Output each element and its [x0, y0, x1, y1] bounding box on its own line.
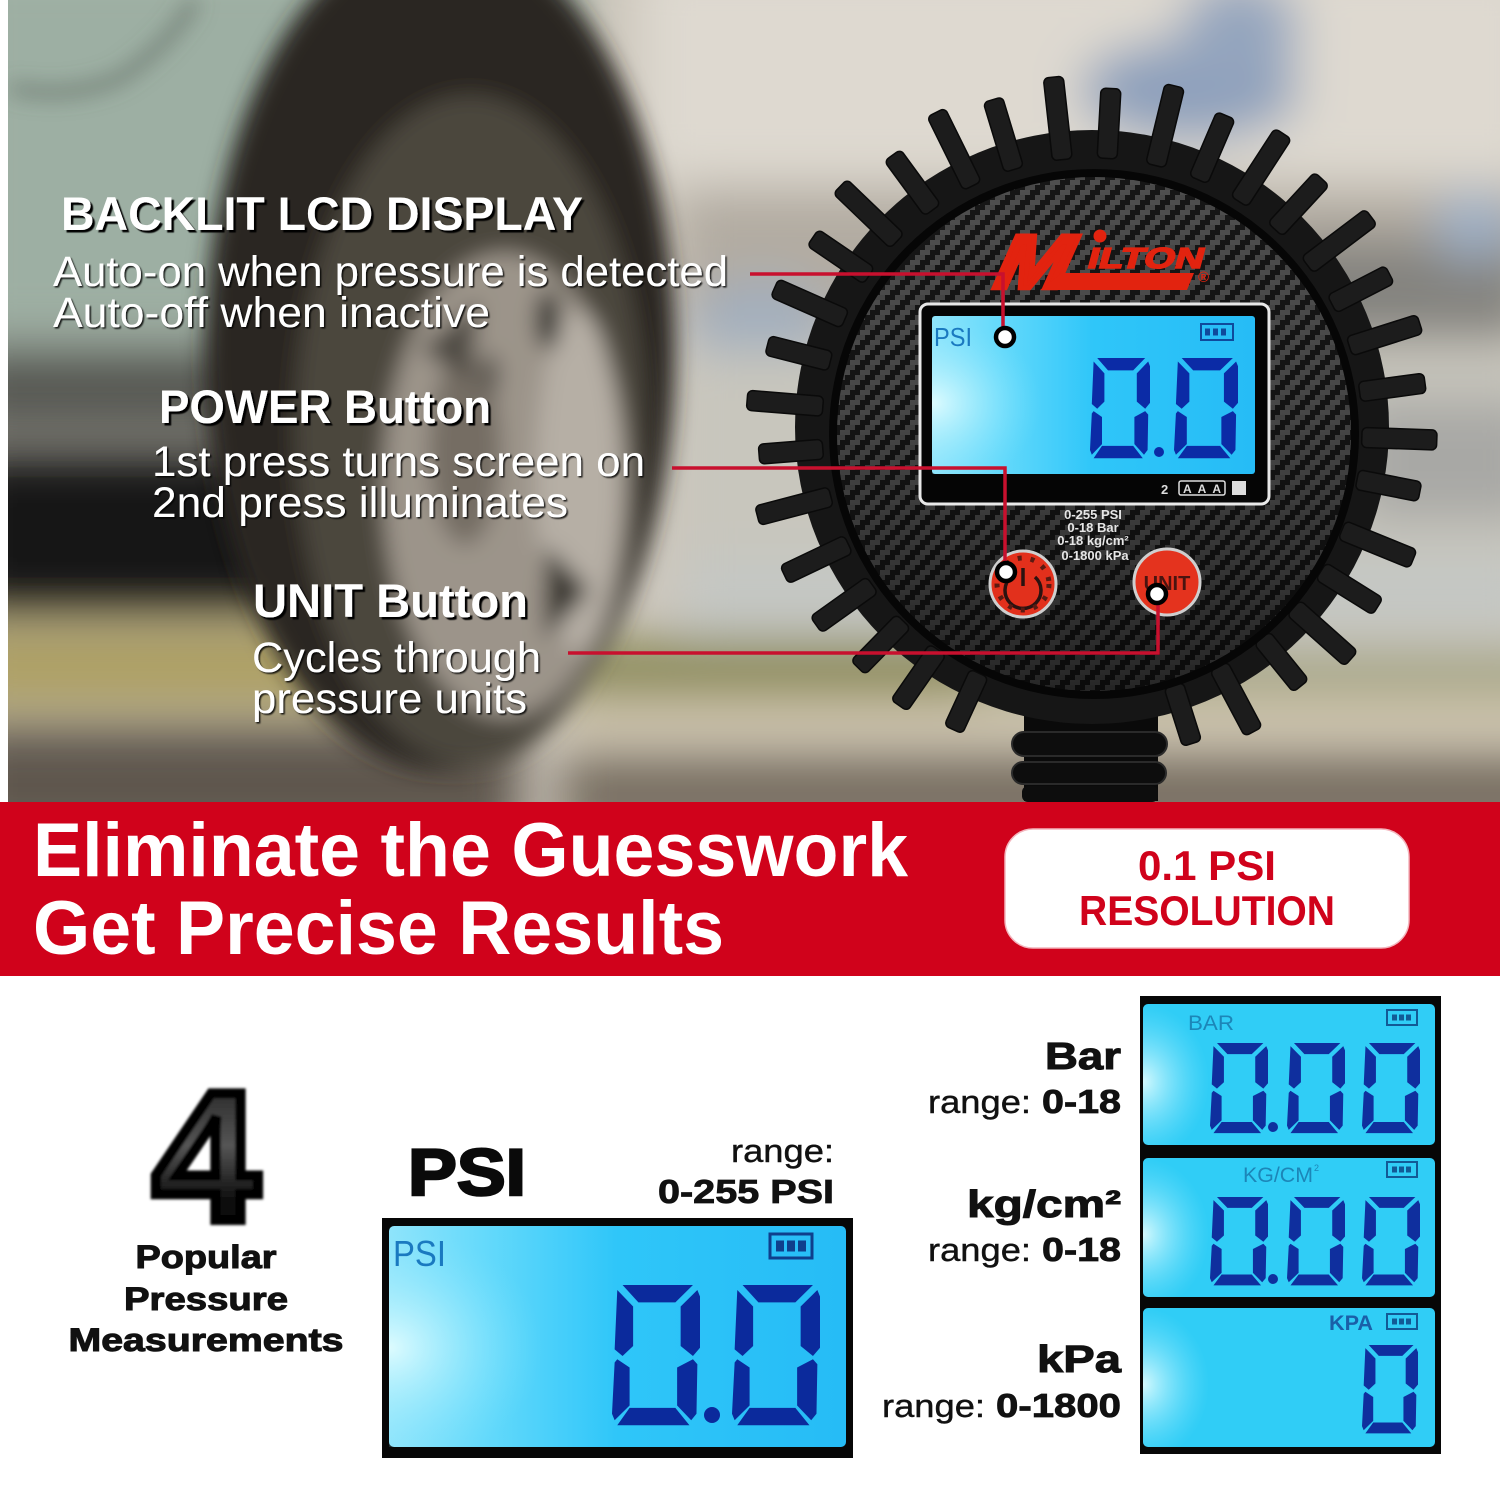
badge: 0.1 PSI resolution: [1005, 829, 1409, 948]
callout text: unit button: Cycles through: [252, 634, 541, 682]
banner headline: [33, 808, 909, 971]
label: kg/cm2 range: 0-18: [1042, 1231, 1121, 1268]
label: kPa range: kPa: [1037, 1339, 1122, 1381]
callout text: unit button: UNIT Button: [253, 574, 528, 627]
LCD: kg/cm2: 2: [1314, 1163, 1319, 1173]
callout lines and dots: [568, 274, 1166, 653]
text: popular pressure measurements: Measurements: [68, 1322, 344, 1358]
banner headline: Eliminate the Guesswork: [33, 808, 909, 893]
power button: [990, 551, 1056, 617]
battery count legend: 2: [1161, 482, 1168, 497]
text: popular pressure measurements: Pressure: [124, 1281, 288, 1317]
numeral 4: 4: [153, 1053, 259, 1259]
label: bar range: 0-18: [1042, 1083, 1121, 1120]
callout text: backlit LCD display: Auto-off when inactive: [53, 289, 490, 337]
LCD reading 0.0: [1090, 358, 1238, 458]
red banner: [0, 802, 1500, 976]
label: kPa range: 0-1800: [996, 1387, 1121, 1424]
logo: Milton: ILTON: [1084, 242, 1209, 275]
callout text: backlit LCD display: [53, 187, 728, 337]
range legend on gauge face: 0-18 kg/cm²: [1057, 533, 1129, 548]
range legend on gauge face: 0-1800 kPa: [1061, 548, 1129, 563]
LCD unit label: PSI: [934, 322, 972, 352]
banner headline: Get Precise Results: [33, 886, 724, 971]
PSI range: range:: [731, 1133, 834, 1169]
logo: Milton: M: [981, 219, 1093, 304]
label: kPa range: [882, 1339, 1122, 1424]
PSI heading: PSI: [408, 1135, 526, 1209]
PSI range: 0-255 PSI: [658, 1173, 834, 1210]
gauge carbon fibre face: [837, 177, 1351, 691]
label: bar range: Bar: [1045, 1036, 1121, 1078]
panel: tire pressure gauge: [746, 76, 1437, 802]
unit button: [1134, 549, 1200, 615]
callout text: power button: 2nd press illuminates: [152, 479, 568, 527]
unit button: UNIT: [1144, 573, 1190, 595]
PSI range: [658, 1133, 834, 1210]
battery count legend: AAA: [1183, 482, 1221, 496]
gauge threaded stem: [1012, 715, 1167, 802]
gauge rubber teeth: [746, 76, 1437, 747]
LCD display: [920, 304, 1269, 504]
LCD: kPa: KPA: [1329, 1312, 1373, 1335]
LCD: kPa: [1143, 1308, 1435, 1447]
PSI LCD panel: PSI: [393, 1233, 446, 1274]
text: popular pressure measurements: [68, 1239, 344, 1358]
battery count legend: [1161, 481, 1246, 497]
PSI LCD panel: [382, 1218, 853, 1458]
callout text: power button: POWER Button: [159, 380, 491, 433]
label: kPa range: range:: [882, 1388, 985, 1424]
text: popular pressure measurements: Popular: [136, 1239, 276, 1275]
callout text: backlit LCD display: BACKLIT LCD DISPLAY: [61, 187, 583, 240]
label: kg/cm2 range: kg/cm²: [967, 1184, 1121, 1226]
logo: Milton: [981, 219, 1209, 304]
LCD: bar: BAR: [1188, 1012, 1234, 1035]
gauge rubber ring: [795, 130, 1389, 724]
callout text: unit button: [252, 574, 541, 723]
range legend on gauge face: [1057, 507, 1129, 563]
battery icon: [770, 1234, 812, 1258]
LCD: kg/cm2: [1143, 1158, 1435, 1297]
badge: 0.1 PSI resolution: RESOLUTION: [1079, 887, 1335, 934]
large reading 0.0: [612, 1285, 820, 1425]
label: kg/cm2 range: [928, 1184, 1121, 1268]
blurred photo background: car wheel and road: [0, 0, 1500, 845]
callout text: unit button: pressure units: [252, 675, 527, 723]
LCD: kg/cm2: KG/CM: [1243, 1164, 1313, 1187]
logo: Milton: ®: [1198, 269, 1209, 286]
range legend on gauge face: 0-18 Bar: [1067, 520, 1119, 535]
panel: three LCD readouts: [1140, 996, 1441, 1454]
gauge inner black ring: [829, 169, 1359, 699]
label: kg/cm2 range: range:: [928, 1232, 1031, 1268]
label: bar range: [928, 1036, 1121, 1120]
LCD: bar: [1143, 1004, 1435, 1145]
callout text: power button: 1st press turns screen on: [152, 438, 645, 486]
label: bar range: range:: [928, 1084, 1031, 1120]
range legend on gauge face: 0-255 PSI: [1064, 507, 1122, 522]
callout text: backlit LCD display: Auto-on when pressure is detected: [53, 248, 728, 296]
callout text: power button: [152, 380, 645, 527]
LCD battery icon: [1201, 324, 1233, 340]
badge: 0.1 PSI resolution: 0.1 PSI: [1138, 842, 1276, 889]
